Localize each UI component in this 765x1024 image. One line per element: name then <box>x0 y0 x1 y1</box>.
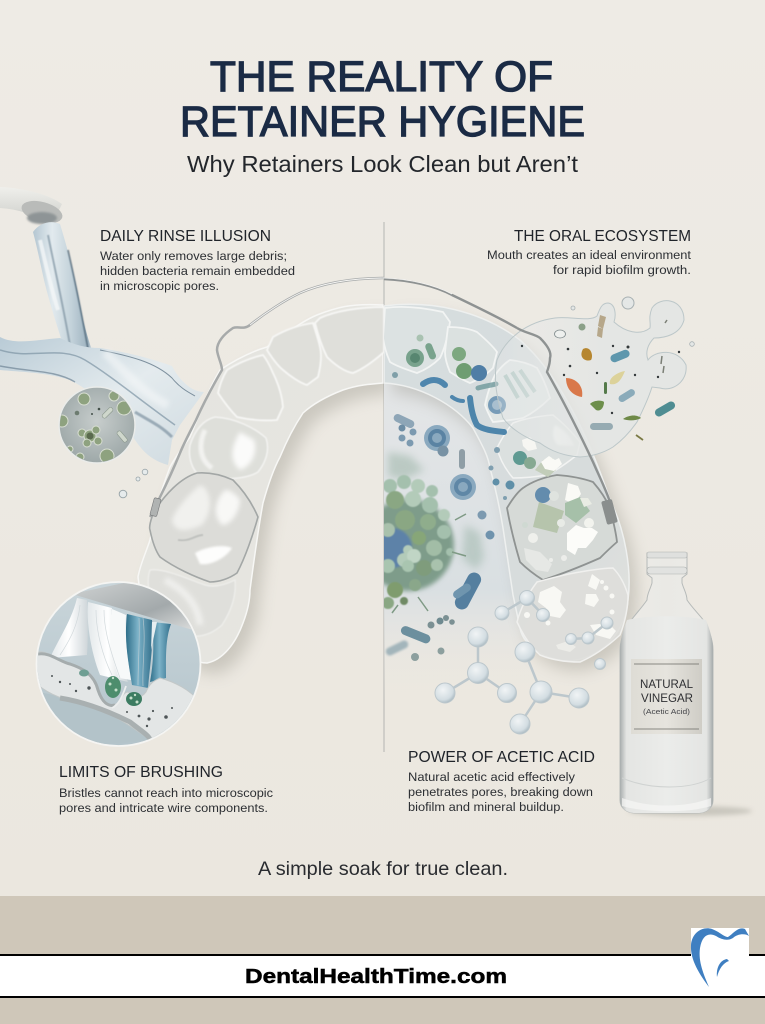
mineral blob <box>517 568 628 662</box>
text: the oral ecosystem: for rapid biofilm growth. <box>553 263 691 277</box>
lower area <box>43 694 148 744</box>
text: limits of brushing <box>59 764 273 815</box>
center divider <box>383 222 385 752</box>
wire over bubble and clasp <box>517 328 618 525</box>
blob minerals <box>524 574 616 652</box>
wire <box>112 686 126 708</box>
molar with wire <box>150 473 258 582</box>
tooth b <box>445 327 497 383</box>
tooth c <box>485 360 550 422</box>
bacterial cluster and microbes <box>384 414 494 661</box>
text: power of acetic acid: Natural acetic acid effectively <box>408 770 576 784</box>
footer band <box>0 896 765 1024</box>
orange debris <box>566 378 582 397</box>
bacteria magnifier circle <box>56 387 135 463</box>
text: the oral ecosystem <box>487 228 692 277</box>
acetic acid molecules <box>435 590 613 734</box>
title: RETAINER HYGIENE <box>180 99 585 146</box>
interior blurred background <box>384 384 518 682</box>
tooth logo <box>691 928 749 987</box>
bottle label: VINEGAR <box>641 691 693 705</box>
text: daily rinse illusion: in microscopic pores. <box>100 279 219 293</box>
pores <box>51 675 173 727</box>
text: daily rinse illusion <box>100 228 295 293</box>
tagline: A simple soak for true clean. <box>258 858 508 880</box>
title: THE REALITY OF <box>210 54 553 101</box>
tooth d <box>497 415 580 478</box>
text: power of acetic acid: penetrates pores, breaking down <box>408 785 593 799</box>
bottle label: (Acetic Acid) <box>643 707 691 716</box>
title <box>180 54 585 146</box>
tooth e <box>507 475 617 580</box>
bacteria in band <box>392 334 535 500</box>
right arch shadow and band <box>392 314 637 671</box>
toothbrush magnifier circle <box>30 581 200 750</box>
trapped bacteria <box>105 676 121 698</box>
bristles <box>50 598 88 658</box>
text: limits of brushing: Bristles cannot reach into microscopic <box>59 786 273 800</box>
text: limits of brushing: LIMITS OF BRUSHING <box>59 764 223 781</box>
wire <box>150 278 384 517</box>
text: limits of brushing: pores and intricate wire components. <box>59 801 268 815</box>
teeth <box>218 307 384 420</box>
right wire <box>384 279 517 328</box>
retainer left half (clean) <box>138 278 392 674</box>
glass bubble with debris <box>495 297 694 457</box>
cross section <box>36 652 200 740</box>
rods <box>609 349 631 363</box>
text: power of acetic acid: biofilm and mineral buildup. <box>408 800 564 814</box>
water stream and splash <box>0 222 204 498</box>
bottle label: NATURAL <box>640 677 693 691</box>
website url: DentalHealthTime.com <box>245 966 507 988</box>
subtitle: Why Retainers Look Clean but Aren’t <box>187 151 579 177</box>
tooth e contents: minerals <box>522 483 598 572</box>
premolar <box>189 417 268 479</box>
text: power of acetic acid <box>408 749 595 814</box>
tooth a <box>383 307 450 373</box>
faucet <box>0 187 65 227</box>
text: daily rinse illusion: hidden bacteria remain embedded <box>100 264 295 278</box>
text: daily rinse illusion: DAILY RINSE ILLUSION <box>100 228 271 245</box>
handle <box>76 583 192 630</box>
retainer right half (contaminated) <box>383 278 637 700</box>
vinegar bottle <box>620 552 752 816</box>
back molar <box>148 570 235 636</box>
text: daily rinse illusion: Water only removes large debris; <box>100 249 287 263</box>
bottle label <box>631 659 702 734</box>
tooth d contents <box>513 437 562 477</box>
text: power of acetic acid: POWER OF ACETIC ACID <box>408 749 595 766</box>
text: the oral ecosystem: THE ORAL ECOSYSTEM <box>514 228 691 245</box>
text: the oral ecosystem: Mouth creates an ideal environment <box>487 248 692 262</box>
